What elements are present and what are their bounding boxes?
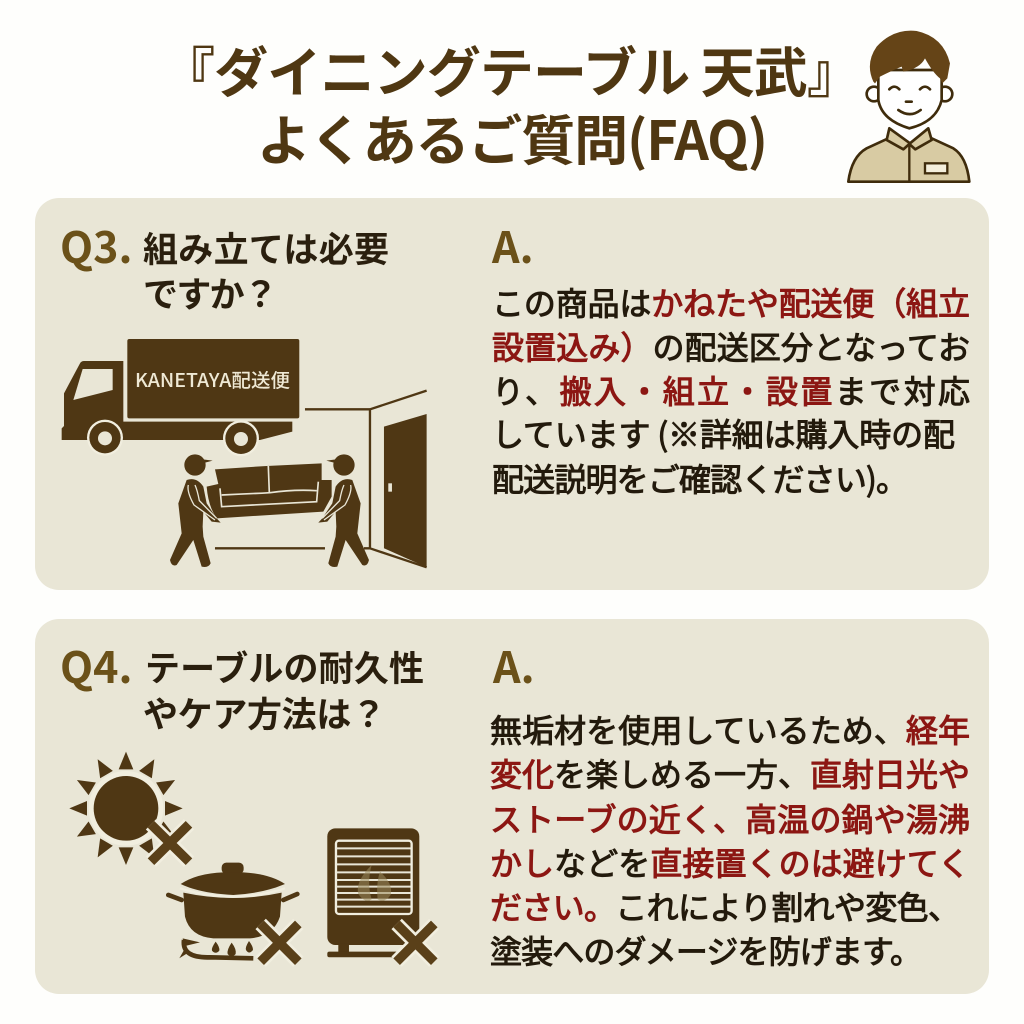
question text Q3: 組み立ては必要 (143, 222, 389, 273)
panel: Q3 (35, 198, 989, 590)
icon: sun crossed out (69, 752, 189, 865)
panel: Q4 (35, 619, 989, 994)
answer text Q4 (490, 706, 970, 973)
title: よくあるご質問(FAQ) (257, 97, 768, 176)
answer text Q4: ストーブの近く、高温の鍋や湯沸 (490, 795, 970, 841)
answer text Q4: ださい。これにより割れや変色、 (490, 883, 960, 929)
answer text Q4: 無垢材を使用しているため、経年 (490, 706, 970, 752)
answer text Q4: 変化を楽しめる一方、直射日光や (490, 750, 970, 796)
icon: heater crossed out (327, 828, 434, 962)
question text Q4: やケア方法は？ (143, 687, 386, 738)
answer text Q4: かしなどを直接置くのは避けてく (490, 839, 970, 885)
truck lettering: KANETAYA配送便 (135, 366, 290, 393)
title: 『ダイニングテーブル 天武』 (161, 29, 861, 108)
question text Q3 (143, 222, 389, 318)
question number Q4: Q4. (60, 634, 132, 696)
answer text Q3: 配送説明をご確認ください)。 (492, 455, 908, 501)
answer text Q3: り、搬入・組立・設置まで対応 (492, 367, 970, 413)
title (161, 29, 861, 176)
icon: movers carrying sofa (170, 454, 369, 567)
icon: delivery truck (62, 339, 299, 456)
question text Q3: ですか？ (143, 267, 278, 318)
icon: room with door (305, 391, 427, 567)
answer text Q4: 塗装へのダメージを防げます。 (490, 927, 922, 973)
answer text Q3: この商品はかねたや配送便（組立 (492, 279, 970, 325)
question text Q4: テーブルの耐久性 (145, 641, 424, 692)
answer text Q3: しています (※詳細は購入時の配 (492, 410, 955, 456)
answer text Q3: 設置込み）の配送区分となってお (492, 323, 970, 369)
answer text Q3 (492, 279, 970, 501)
answer label Q3: A. (491, 214, 534, 276)
answer label Q4: A. (492, 634, 535, 696)
question text Q4 (143, 641, 424, 738)
question number Q3: Q3. (60, 214, 132, 276)
icon: pot on stove crossed out (168, 863, 298, 962)
icon: staff member (848, 31, 969, 182)
